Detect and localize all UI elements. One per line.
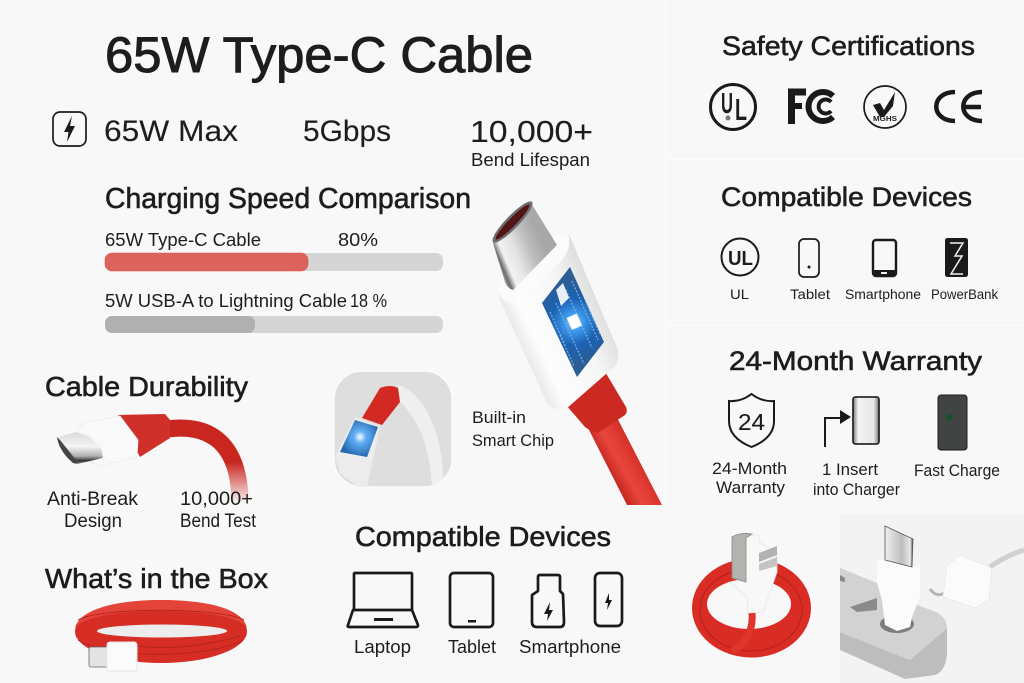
heading: durability: Cable Durability: [45, 371, 248, 402]
label: bend test: 10,000+: [180, 488, 253, 510]
icon: tablet small: [799, 239, 819, 277]
photo: coiled cable with right-angle plug: [692, 533, 811, 658]
panel: cable durability: [45, 371, 257, 532]
panel: safety certifications: [710, 31, 982, 130]
label: tablet: Tablet: [790, 286, 830, 302]
circuit chip window: [542, 267, 604, 377]
label: smartphone: Smartphone: [845, 286, 921, 302]
heading: compatible devices bottom: Compatible Devices: [355, 521, 611, 552]
icon: UL mark: L: [735, 92, 747, 127]
icon: UL small: [722, 238, 758, 276]
label: 24-month warranty: [712, 459, 787, 497]
label: 24-month warranty: 24-Month: [712, 459, 787, 478]
spec: bend lifespan: [470, 114, 593, 170]
heading: charging speed: Charging Speed Comparison: [105, 183, 471, 215]
icon: UL mark: U: [721, 88, 733, 120]
panel: warranty: [712, 346, 1000, 499]
label: smart chip: Built-in: [472, 408, 526, 427]
label: powerbank: PowerBank: [931, 286, 999, 302]
bar label: 5W: 5W USB-A to Lightning Cable: [105, 291, 347, 311]
panel: charging speed comparison: [105, 183, 471, 333]
icon: smartphone small: [873, 240, 896, 276]
label: anti-break: [47, 488, 138, 532]
icon: insert arrow: [825, 410, 851, 447]
label: smart chip: Smart Chip: [472, 431, 554, 450]
bar: 5W track and fill: [105, 316, 443, 333]
icon: lightning bolt: [53, 112, 86, 146]
label: UL: UL: [730, 286, 749, 302]
icon: laptop: [348, 573, 418, 627]
durability cable illustration: [57, 414, 240, 504]
icon: smartphone: [595, 573, 622, 626]
photo: cable plugged into power strip: [840, 513, 1024, 683]
spec: bend lifespan: Bend Lifespan: [471, 149, 590, 170]
labels: laptop: Laptop: [354, 637, 411, 657]
icon: power bank small: [945, 238, 968, 277]
heading: safety: Safety Certifications: [722, 31, 975, 61]
bar value: 18%: 18 %: [350, 291, 387, 311]
spec: 5Gbps: 5Gbps: [303, 115, 391, 148]
labels: smartphone: Smartphone: [519, 637, 621, 657]
panel: compatible devices bottom: [348, 521, 622, 657]
metal connector: [488, 197, 557, 290]
label: smart chip: [472, 408, 554, 450]
spec: 65W max: 65W Max: [104, 115, 238, 148]
label: anti-break: Anti-Break: [47, 488, 138, 510]
label: bend test: Bend Test: [180, 510, 257, 532]
icon: FCC mark: [792, 92, 833, 124]
red collar: [566, 370, 627, 433]
white moulded housing: [498, 233, 618, 410]
icon: phone outline: [853, 397, 879, 444]
label: anti-break: Design: [64, 510, 122, 532]
icon: UL small: UL: [728, 248, 753, 270]
icon: MGHS check: [864, 86, 906, 128]
label: insert into charger: into Charger: [813, 480, 900, 499]
label: fast charge: Fast Charge: [914, 461, 1000, 480]
bar label: 65W: 65W Type-C Cable: [105, 230, 261, 250]
icon: CE mark: [936, 92, 982, 121]
panel: what's in the box: [45, 563, 268, 671]
spec: bend lifespan: 10,000+: [470, 114, 593, 149]
icon: tablet: [450, 573, 493, 627]
panel: compatible devices right: [721, 182, 999, 302]
red cable: [585, 408, 662, 505]
main cable illustration: [488, 197, 662, 505]
key specs row: [53, 112, 593, 170]
chip thumbnail: [334, 371, 452, 487]
heading: compatible devices right: Compatible Devices: [721, 182, 972, 212]
icon: fast charge phone: [938, 395, 967, 450]
title: 65W Type-C Cable: [105, 27, 533, 83]
housing front face: [498, 233, 569, 303]
icon: shield 24: [729, 394, 774, 447]
coiled cable illustration: [75, 600, 247, 671]
heading: warranty: 24-Month Warranty: [729, 346, 983, 376]
icon: UL mark: [710, 84, 756, 130]
label: insert into charger: 1 Insert: [822, 460, 878, 479]
label: bend test: [180, 488, 257, 532]
labels: tablet: Tablet: [448, 637, 496, 657]
panel: built-in smart chip: [334, 371, 554, 487]
label: insert into charger: [813, 460, 900, 499]
label: 24-month warranty: Warranty: [716, 478, 786, 497]
icon: power bank: [532, 575, 564, 627]
heading: box: What’s in the Box: [45, 563, 268, 594]
bar: 65W track and fill: [105, 253, 443, 271]
icon: MGHS check: MGHS: [873, 114, 897, 123]
icon: shield 24: 24: [738, 409, 765, 435]
bar value: 80%: 80%: [338, 230, 378, 250]
